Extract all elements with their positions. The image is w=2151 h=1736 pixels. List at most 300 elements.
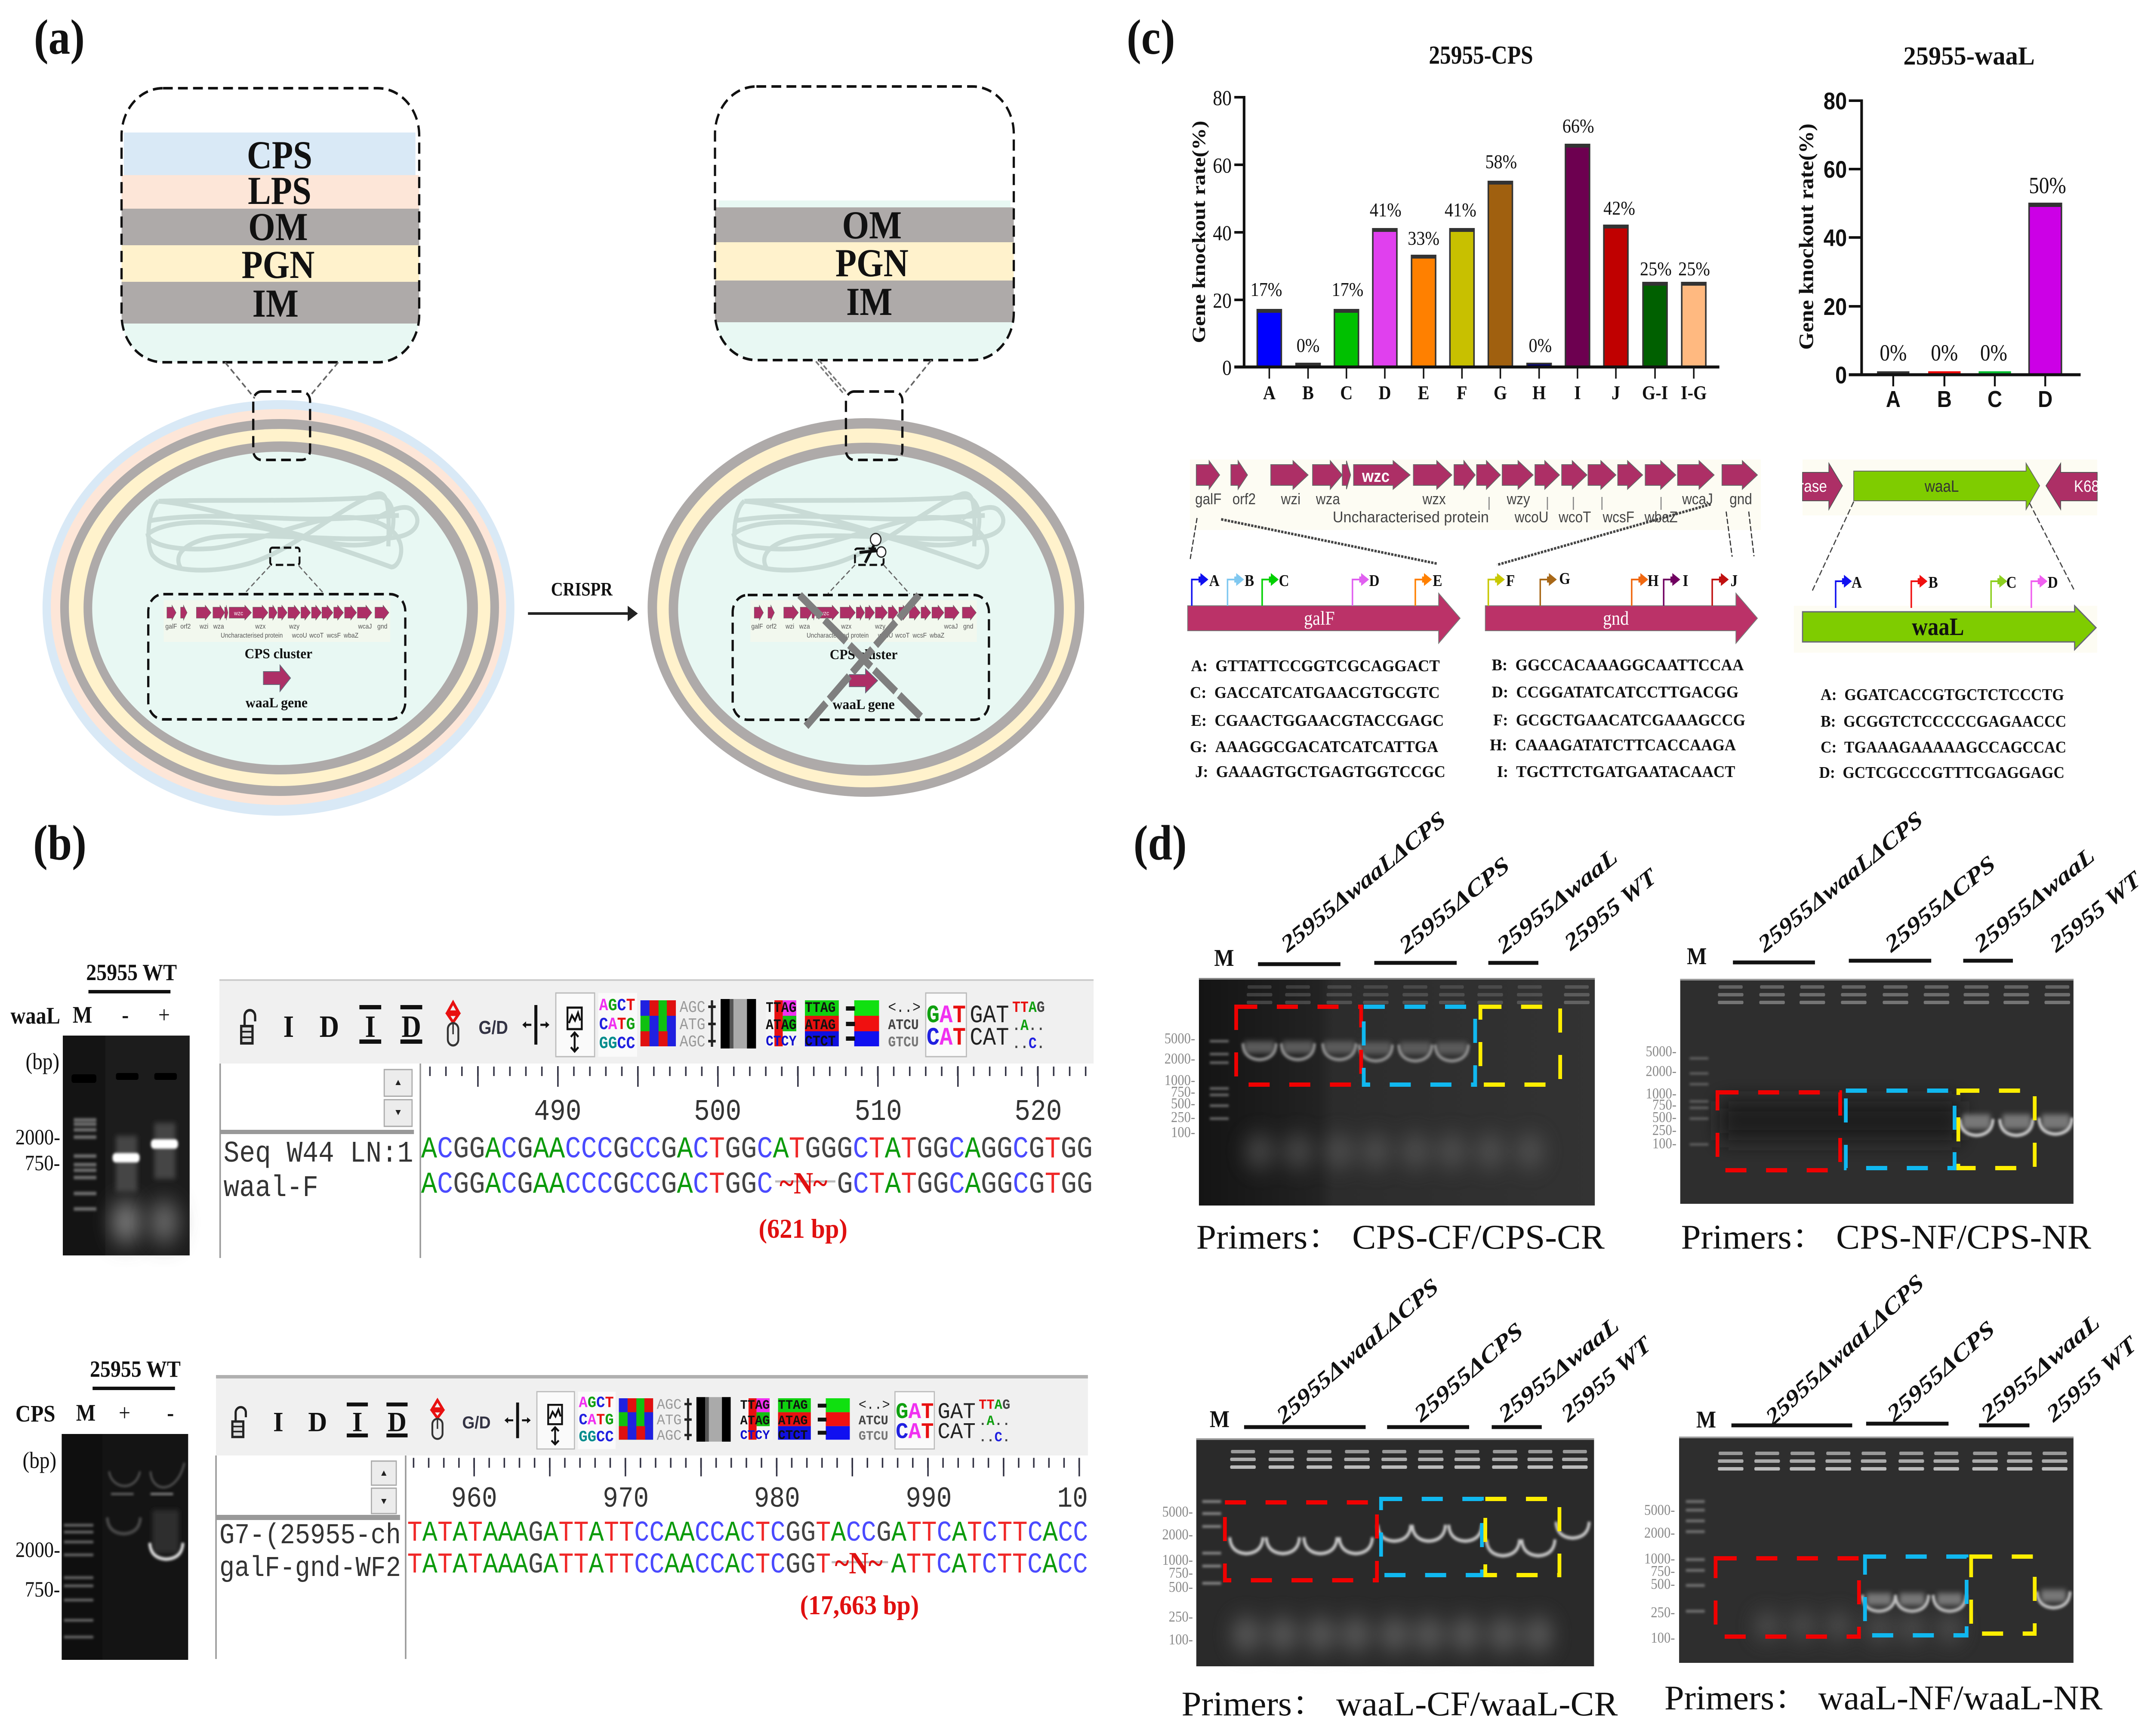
gel: waaL-CF/waaL-CR: M [1210,1406,1230,1433]
label c: (c) [1127,9,1175,65]
cell wall callout: knockout: IM [846,280,892,324]
bar chart: 25955-CPS: 58% [1485,151,1517,173]
toolbar 1 [219,979,1094,1064]
alignment: CPS: TATATAAAGATTATTCCAACCACTCGGTACCGATTCATCTTCACC [407,1517,1088,1549]
gene arrow: gnd with primers: G [1559,569,1570,588]
gel: waaL-NF/waaL-NR: 1000- [1644,1551,1675,1567]
gel: CPS-CF/CPS-CR: 25955ΔCPS [1395,851,1514,959]
cell wall callout: knockout: OM [842,203,902,247]
gel: CPS: 25955 WT [90,1356,181,1382]
alignment: CPS: TATATAAAGATTATTCCAACCACTCGGT [407,1549,831,1581]
gel: waaL-NF/waaL-NR: Primers： waaL-NF/waaL-NR [1664,1679,2103,1717]
alignment: CPS: galF-gnd-WF2 [219,1552,401,1585]
gene arrow: galF with primers: B [1245,571,1254,590]
toolbar 2: I [352,1406,362,1437]
bar chart: 25955-CPS: 17% [1251,279,1282,301]
toolbar 2: ATAG [740,1413,770,1428]
gel: CPS-NF/CPS-NR: 2000- [1646,1063,1676,1080]
toolbar 2: CAT [896,1420,934,1445]
toolbar 1: TTAG [766,999,796,1017]
gel: waaL-CF/waaL-CR: 25955ΔwaaL [1494,1312,1623,1428]
alignment: waaL [220,1064,1094,1258]
toolbar 2: ATG [657,1412,682,1429]
gel: waaL: - [122,1002,129,1028]
gel: CPS-CF/CPS-CR: Primers： CPS-CF/CPS-CR [1196,1218,1605,1256]
gene arrow: galF with primers: galF [1304,607,1335,629]
gel: CPS [15,1356,188,1660]
bar chart: 25955-waaL: C [1988,386,2002,412]
gene cluster inset: knockout: orf2 [766,623,777,630]
gene map: CPS cluster: wcoU [1514,509,1549,526]
sgRNA sequences: waaL: B: GCGGTCTCCCCCGAGAACCC [1821,712,2066,731]
gene map: CPS cluster: gnd [1729,490,1752,508]
toolbar 1: ATAG [766,1017,796,1034]
alignment: waaL: 520 [1014,1095,1062,1129]
toolbar 1: AGC [680,998,706,1017]
gel: waaL-NF/waaL-NR: 250- [1651,1604,1675,1621]
bar chart: 25955-waaL: 60 [1824,156,1847,183]
gel: waaL-NF/waaL-NR: 25955ΔwaaL [1976,1309,2104,1428]
bar chart: 25955-CPS: 42% [1603,197,1635,219]
toolbar 2: ATCU [859,1413,888,1428]
gel: waaL-CF/waaL-CR: 1000- [1162,1552,1193,1569]
sgRNA sequences: galF/gnd column 1: G: AAAGGCGACATCATCATTGA [1190,737,1438,756]
toolbar 1: TTAG [805,999,835,1017]
gel: waaL: 750- [25,1151,60,1175]
gene arrow: waaL with primers: waaL [1912,613,1964,641]
toolbar 2: CATG [579,1412,614,1429]
gene cluster inset: wild type: wbaZ [343,632,358,639]
sgRNA sequences: galF/gnd column 1: C: GACCATCATGAACGTGCGTC [1190,683,1440,702]
sgRNA sequences: galF/gnd column 2: H: CAAAGATATCTTCACCAAGA [1490,736,1736,754]
panel: d [1134,806,2146,1723]
toolbar 2: D [308,1406,327,1437]
gene map: CPS cluster: wzy [1507,490,1530,508]
toolbar 1: D [401,1009,421,1044]
gene map: CPS cluster: wza [1316,490,1340,508]
gel: CPS-NF/CPS-NR: 100- [1652,1135,1676,1152]
alignment: waaL: Seq W44 LN:1 [224,1136,413,1171]
gene map: CPS cluster [1190,459,1761,565]
gel: CPS: - [167,1400,174,1426]
sgRNA sequences: galF/gnd column 2: B: GGCCACAAAGGCAATTCCAA [1492,656,1744,674]
gene cluster inset: knockout: wcaJ [944,623,958,630]
gel: waaL-CF/waaL-CR: 25955 WT [1556,1330,1656,1428]
toolbar 1: CAT [927,1024,966,1052]
gel: CPS-CF/CPS-CR: 25955ΔwaaL [1492,843,1622,959]
bar chart: 25955-CPS: 80 [1213,86,1232,110]
toolbar 1: GAT [927,1002,966,1030]
gel: CPS-CF/CPS-CR: 5000- [1165,1030,1195,1047]
toolbar 2: GAT [896,1400,934,1425]
gel: waaL-NF/waaL-NR: M [1696,1406,1716,1433]
gene map: CPS cluster: orf2 [1233,490,1256,508]
gel: CPS: M [76,1400,96,1426]
bar chart: 25955-CPS: G [1494,382,1507,404]
bar chart: 25955-CPS: 25955-CPS [1429,41,1533,70]
gel: CPS-NF/CPS-NR: 25955ΔwaaL [1969,842,2099,958]
toolbar 2: D [388,1406,407,1437]
gene arrow: gnd with primers: I [1683,571,1688,590]
gel: waaL [10,959,190,1255]
alignment: waaL: (621 bp) [758,1214,847,1244]
toolbar 2: <..> [859,1398,890,1413]
cell wall callout: knockout: PGN [835,241,909,285]
bar chart: 25955-CPS: I [1574,382,1581,404]
gene cluster inset: knockout: wcsF [912,632,927,639]
gel: waaL-NF/waaL-NR: 25955 WT [2042,1330,2142,1428]
gene cluster inset: knockout: wbaZ [929,632,944,639]
gene cluster inset: knockout: wcoT [895,632,909,639]
toolbar 1: TTAG [1012,999,1045,1017]
panel: a [34,9,1084,816]
toolbar 1: ATAG [805,1017,835,1034]
cell wall callout: knockout [715,86,1014,361]
gel: waaL-CF/waaL-CR: 750- [1169,1565,1193,1582]
toolbar 1: I [284,1009,294,1044]
gene cluster inset: wild type: wzc [234,610,243,617]
gel: waaL-CF/waaL-CR: 2000- [1162,1526,1193,1543]
gene map: CPS cluster: wcaJ [1682,490,1713,508]
gel: waaL-NF/waaL-NR: 25955ΔwaaLΔCPS [1761,1269,1928,1431]
gel: CPS: CPS [15,1401,55,1427]
arrow: CRISPR [528,579,638,621]
cell wall callout: wild type: OM [248,205,308,249]
bar chart: 25955-CPS: 40 [1213,221,1232,245]
bar chart: 25955-CPS: 60 [1213,154,1232,178]
cell wall callout: wild type: PGN [241,243,314,287]
gene cluster inset: knockout: wzc [820,610,829,617]
alignment: CPS: G7-(25955-ch [219,1520,401,1552]
bar chart: 25955-CPS: I-G [1681,382,1707,404]
gene cluster inset: wild type: waaL gene [246,694,308,710]
alignment: CPS: 10 [1057,1483,1088,1516]
gel: waaL: 25955 WT [86,959,177,985]
gene cluster inset: knockout: wcoU [878,632,893,639]
sgRNA sequences: galF/gnd column 2: D: CCGGATATCATCCTTGACGG [1492,683,1738,701]
toolbar 1: CTCT [805,1033,835,1050]
gene arrow: galF with primers [1188,571,1460,643]
arrow: CRISPR: CRISPR [551,579,613,600]
gel: CPS: 750- [25,1577,60,1602]
bar chart: 25955-waaL: 40 [1824,225,1847,252]
cell wall callout: wild type: LPS [248,169,311,213]
gel: waaL-CF/waaL-CR: 500- [1169,1579,1193,1596]
gene arrow: waaL with primers: A [1852,573,1862,592]
gene arrow: waaL with primers: B [1928,573,1938,592]
gene map: CPS cluster: Uncharacterised protein [1333,509,1489,526]
label a: (a) [34,9,85,65]
gel: CPS-NF/CPS-NR: 500- [1652,1109,1676,1126]
gene cluster inset: knockout: CPS cluster [830,646,897,662]
gene arrow: gnd with primers: H [1648,571,1659,590]
bar chart: 25955-CPS: H [1532,382,1546,404]
gene map: CPS cluster: wcsF [1602,509,1634,526]
sgRNA sequences: waaL: D: GCTCGCCCGTTTCGAGGAGC [1819,763,2065,782]
panel: b [10,815,1094,1660]
gel: CPS-NF/CPS-NR: Primers： CPS-NF/CPS-NR [1681,1218,2092,1256]
toolbar 2: GTCU [859,1429,888,1444]
bar chart: 25955-waaL: 50% [2029,173,2066,198]
sgRNA sequences: waaL: C: TGAAAGAAAAAGCCAGCCAC [1821,738,2066,756]
panel: c [1127,9,2099,782]
alignment: waaL: waal-F [224,1171,318,1205]
alignment: CPS: ATTCATCTTCACC [891,1549,1088,1581]
gene cluster inset: knockout: wzi [785,623,794,630]
bar chart: 25955-CPS: 20 [1213,289,1232,313]
gene cluster inset: wild type: wcsF [327,632,341,639]
gene arrow: galF with primers: E [1433,571,1442,590]
bar chart: 25955-CPS: 0% [1529,335,1552,357]
gene arrow: galF with primers: C [1279,571,1289,590]
sgRNA sequences: galF/gnd column 2: I: TGCTTCTGATGAATACAACT [1497,762,1735,781]
cell wall callout: wild type: IM [253,281,299,325]
toolbar 2: CTCY [740,1428,770,1443]
bar chart: 25955-CPS: 25% [1678,258,1710,280]
label b: (b) [33,815,86,871]
alignment: waaL: ACGGACGAACCCGCCGACTGGC [421,1167,773,1202]
gene cluster inset: wild type: gnd [377,623,387,630]
gel: CPS-NF/CPS-NR [1646,806,2146,1256]
bar chart: 25955-CPS: 33% [1408,228,1439,250]
sgRNA sequences: galF/gnd column 1: E: CGAACTGGAACGTACCGAGC [1191,711,1444,730]
bacterial cell: wild type [43,362,515,816]
gene cluster inset: knockout: waaL gene [832,696,895,712]
toolbar 2: ..C. [979,1430,1010,1446]
bar chart: 25955-CPS: 25% [1640,258,1672,280]
gene map: CPS cluster: wzc [1362,466,1390,486]
gel: CPS-CF/CPS-CR: 750- [1171,1084,1195,1101]
gel: CPS-CF/CPS-CR: 2000- [1165,1051,1195,1067]
gel: CPS: (bp) [22,1447,56,1473]
gene arrow: waaL with primers: D [2048,573,2058,592]
gel: CPS-CF/CPS-CR: 500- [1171,1095,1195,1112]
gel: CPS-NF/CPS-NR: 25955ΔwaaLΔCPS [1753,806,1927,958]
gene cluster inset: wild type: wzx [255,623,266,630]
gel: waaL-NF/waaL-NR [1644,1269,2142,1717]
gel: waaL-CF/waaL-CR: 100- [1169,1631,1193,1648]
gene cluster inset: wild type: CPS cluster [245,645,312,661]
gene cluster inset: wild type: orf2 [180,623,191,630]
bar chart: 25955-CPS: 17% [1332,279,1363,301]
toolbar 1: ATG [680,1015,706,1034]
alignment: waaL: ACGGACGAACCCGCCGACTGGCATGGGCTATGGCAGGCGTGG [421,1132,1093,1166]
gel: waaL-NF/waaL-NR: 100- [1651,1630,1675,1647]
gel: CPS-NF/CPS-NR: 25955ΔCPS [1880,850,2000,958]
gene cluster inset: wild type: Uncharacterised protein [221,632,283,639]
gene cluster inset: wild type: wzi [199,623,208,630]
toolbar 1: GTCU [888,1034,919,1051]
gene arrow: gnd with primers: F [1506,571,1515,590]
gel: waaL-NF/waaL-NR: 500- [1651,1576,1675,1593]
gene cluster inset: knockout: wza [799,623,810,630]
gene map: CPS cluster: wcoT [1558,509,1591,526]
alignment: CPS: 960 [451,1483,497,1516]
gel: CPS-CF/CPS-CR: 25955ΔwaaLΔCPS [1276,806,1450,958]
bar chart: 25955-CPS: F [1457,382,1467,404]
gene cluster inset: knockout: Uncharacterised protein [807,632,869,639]
toolbar 2: GAT [937,1400,976,1425]
gene cluster inset: wild type: wcoT [309,632,324,639]
toolbar 1: .A.. [1012,1018,1045,1035]
gene cluster inset: knockout [733,595,989,720]
toolbar 2: G/D [462,1413,491,1432]
gel: waaL: + [158,1002,170,1028]
toolbar 2: I [273,1406,284,1437]
gel: CPS-NF/CPS-NR: 750- [1652,1097,1676,1113]
gene map: CPS cluster: wbaZ [1644,509,1678,526]
bar chart: 25955-CPS: Gene knockout rate(%) [1189,120,1209,343]
gel: waaL: M [73,1002,92,1028]
bar chart: 25955-CPS: C [1340,382,1353,404]
gene cluster inset: wild type: wza [213,623,224,630]
gene map: CPS cluster: wzi [1281,490,1300,508]
toolbar 2: ATAG [778,1413,808,1428]
sgRNA sequences: galF/gnd column 1: J: GAAAGTGCTGAGTGGTCCGC [1195,762,1445,781]
gel: waaL: waaL [10,1003,60,1029]
bar chart: 25955-waaL: 0% [1931,340,1958,366]
bar chart: 25955-waaL: 0 [1835,362,1847,389]
bar chart: 25955-CPS: 41% [1445,199,1476,221]
gene arrow: galF with primers: D [1369,571,1380,590]
gel: waaL: 2000- [15,1125,60,1150]
bacterial cell: knockout [647,360,1084,797]
toolbar 1: ..C. [1012,1036,1045,1053]
gel: CPS-CF/CPS-CR: 250- [1171,1109,1195,1126]
bar chart: 25955-waaL: Gene knockout rate(%) [1795,123,1818,350]
gel: waaL-NF/waaL-NR: 2000- [1644,1525,1675,1542]
bar chart: 25955-CPS: 41% [1370,199,1402,221]
bar chart: 25955-CPS: B [1302,382,1314,404]
bar chart: 25955-CPS [1189,41,1720,404]
toolbar 2: AGC [657,1427,682,1444]
toolbar 2: GGCC [579,1429,614,1446]
toolbar 1: CAT [970,1024,1009,1052]
gene cluster inset: wild type: galF [165,623,177,630]
gene map: CPS cluster: galF [1195,490,1221,508]
gene cluster inset: wild type: wzy [289,623,300,630]
bar chart: 25955-waaL: 80 [1824,88,1847,115]
gel: waaL-NF/waaL-NR: 750- [1651,1563,1675,1580]
gene map: CPS cluster: wzx [1422,490,1446,508]
gel: waaL-CF/waaL-CR: 25955ΔCPS [1410,1317,1527,1428]
alignment: waaL: 490 [534,1095,581,1129]
alignment: CPS: 990 [906,1483,952,1516]
sgRNA sequences: waaL [1819,685,2066,782]
gene cluster inset: knockout: galF [751,623,763,630]
sgRNA sequences: galF/gnd column 2 [1490,656,1745,781]
alignment: CPS [216,1455,1088,1659]
gene cluster inset: wild type: wcaJ [358,623,372,630]
cell wall callout: wild type: CPS [247,133,312,177]
gene map: waaL region: rase [1799,477,1827,496]
alignment: CPS: 980 [754,1483,800,1516]
gene arrow: waaL with primers [1794,573,2097,653]
cell wall callout: wild type [122,88,419,362]
gel: CPS-CF/CPS-CR: 1000- [1165,1072,1195,1089]
gel: CPS-NF/CPS-NR: 1000- [1646,1085,1676,1102]
bar chart: 25955-CPS: 66% [1562,115,1594,137]
toolbar 1: D [320,1009,339,1044]
gene cluster inset: knockout: wzy [875,623,886,630]
bar chart: 25955-waaL: 25955-waaL [1903,42,2035,71]
gene arrow: gnd with primers: gnd [1603,607,1629,629]
bar chart: 25955-CPS: G-I [1642,382,1668,404]
alignment: waaL: 510 [855,1095,902,1129]
sgRNA sequences: galF/gnd column 2: F: GCGCTGAACATCGAAAGCCG [1493,711,1745,729]
gene map: waaL region: K68 [2074,477,2099,496]
bar chart: 25955-waaL: B [1937,386,1952,412]
gene arrow: galF with primers: A [1209,571,1220,590]
bar chart: 25955-waaL [1795,42,2080,412]
toolbar 1: GGCC [599,1034,635,1054]
bar chart: 25955-waaL: A [1886,386,1901,412]
toolbar 2: AGC [657,1396,682,1413]
bar chart: 25955-waaL: 0% [1880,340,1907,366]
toolbar 1: ATCU [888,1017,919,1034]
gel: CPS-CF/CPS-CR: 25955 WT [1560,863,1661,956]
toolbar 1: AGCT [599,996,635,1016]
toolbar 2 [216,1375,1088,1455]
gel: CPS: + [119,1400,130,1426]
toolbar 2: TTAG [778,1398,808,1413]
gene cluster inset: wild type: wcoU [292,632,307,639]
toolbar 2: TTAG [740,1398,770,1413]
alignment: CPS: 970 [603,1483,649,1516]
gel: waaL-CF/waaL-CR: 250- [1169,1609,1193,1625]
toolbar 1: <..> [888,999,921,1017]
gel: waaL-CF/waaL-CR: Primers： waaL-CF/waaL-CR [1182,1685,1618,1723]
alignment: CPS: (17,663 bp) [800,1590,919,1621]
alignment: waaL: ~N~ [780,1166,827,1200]
gel: CPS-NF/CPS-NR: 25955 WT [2045,866,2146,958]
bar chart: 25955-CPS: 0 [1222,356,1232,380]
sgRNA sequences: galF/gnd column 1 [1190,657,1445,781]
gel: waaL: (bp) [25,1048,59,1074]
icon: scissors [860,533,886,563]
sgRNA sequences: galF/gnd column 1: A: GTTATTCCGGTCGCAGGACT [1191,657,1440,675]
toolbar 2: CAT [937,1420,976,1445]
alignment: waaL: GCTATGGCAGGCGTGG [837,1167,1093,1202]
gel: CPS-NF/CPS-NR: 250- [1652,1122,1676,1139]
toolbar 1: CATG [599,1015,635,1035]
toolbar 1: GAT [970,1002,1009,1030]
gel: CPS-NF/CPS-NR: 5000- [1646,1043,1676,1060]
gene arrow: gnd with primers [1485,569,1757,643]
toolbar 1: G/D [479,1017,508,1038]
gene arrow: waaL with primers: C [2006,573,2016,592]
gene map: waaL region [1799,459,2099,591]
gel: waaL-CF/waaL-CR: 5000- [1162,1504,1193,1520]
bar chart: 25955-waaL: 0% [1980,340,2007,366]
gene cluster inset: knockout: wzx [841,623,852,630]
gene arrow: gnd with primers: J [1730,571,1738,590]
toolbar 1: AGC [680,1033,706,1051]
label d: (d) [1134,815,1187,871]
alignment: CPS: ~N~ [835,1546,883,1580]
bar chart: 25955-CPS: E [1418,382,1430,404]
toolbar 2: CTCT [778,1428,808,1443]
bar chart: 25955-CPS: A [1263,382,1276,404]
toolbar 2: AGCT [579,1395,614,1412]
gel: waaL-NF/waaL-NR: 25955ΔCPS [1883,1315,1999,1428]
gel: CPS-NF/CPS-NR: M [1687,943,1707,970]
gel: CPS: 2000- [15,1538,60,1562]
bar chart: 25955-CPS: D [1379,382,1391,404]
gene cluster inset: knockout: gnd [963,623,973,630]
gel: CPS-CF/CPS-CR: M [1214,945,1234,971]
alignment: waaL: 500 [694,1095,741,1129]
